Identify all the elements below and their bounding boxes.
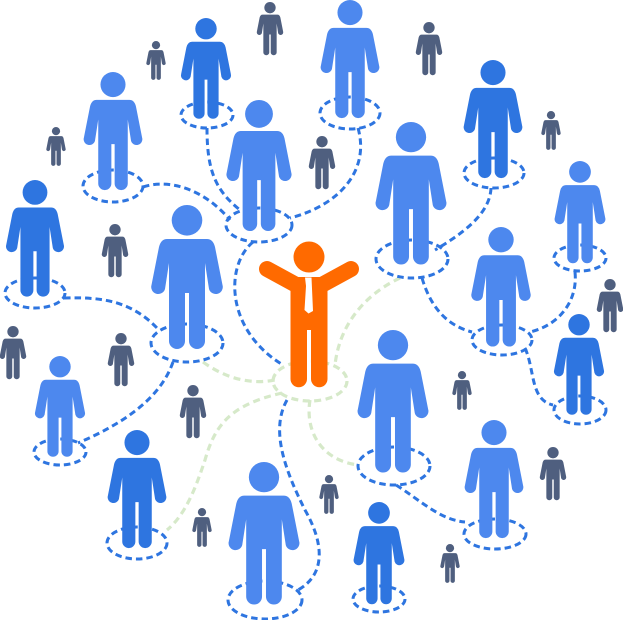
green dashed connectors <box>167 278 400 530</box>
blue dashed connectors <box>64 128 575 590</box>
central orange person with raised arms and tie <box>267 242 351 387</box>
